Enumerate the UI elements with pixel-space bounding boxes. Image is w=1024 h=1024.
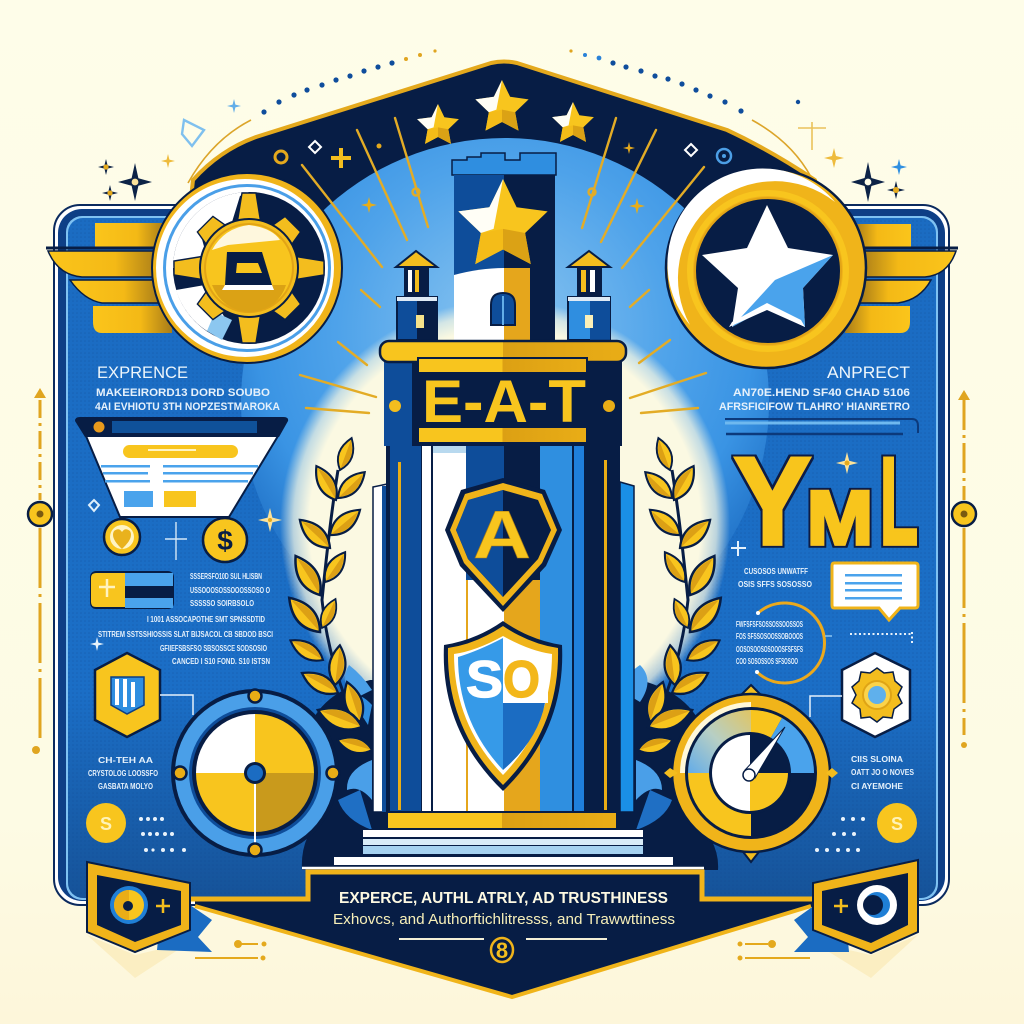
wings: left: [46, 223, 172, 333]
dotted tick row: [850, 632, 912, 643]
dots: right: [815, 817, 865, 852]
S coin: left: [86, 803, 126, 843]
small copy: right lower: CIIS SLOINA: [851, 755, 903, 764]
dots: left: [139, 817, 186, 852]
sparkles: top right: [752, 120, 907, 202]
ribbon badge: right: [794, 860, 918, 953]
gold rays: [300, 118, 706, 413]
circular arc callout: FOS SFSSOSOOSSOBOOOS: [736, 632, 803, 641]
column base and steps: [330, 812, 676, 869]
dome ornaments: [275, 141, 731, 214]
anprect copy: AFRSFICIFOW TLAHRO' HIANRETRO: [719, 401, 910, 413]
dome: navy crown: [180, 62, 830, 300]
small copy: right lower: [851, 755, 915, 791]
browser funnel: [75, 417, 288, 517]
anprect rule lines: [725, 419, 918, 434]
experience copy: 4AI EVHIOTU 3TH NOPZESTMAROKA: [95, 401, 280, 413]
small copy: right upper: CUSOSOS UNWATFF: [744, 567, 808, 576]
shield A: A: [473, 497, 531, 573]
experience copy: [95, 387, 280, 413]
pie gauge: left: [171, 689, 340, 857]
small copy: right lower: CI AYEMOHE: [851, 782, 904, 791]
small copy: left middle: [98, 572, 273, 666]
dial gauge: right: [664, 685, 838, 862]
light-blue arch: [241, 138, 769, 666]
experience copy: MAKEEIRORD13 DORD SOUBO: [96, 387, 270, 399]
cream halo: [280, 300, 730, 750]
laurel branch: left: [282, 436, 374, 757]
medallion: gear: [152, 173, 342, 363]
central column: [373, 445, 634, 812]
small copy: left middle: SSSSSO SOIRBSOLO: [190, 599, 254, 608]
navy foliage base: [302, 665, 718, 870]
experience heading: EXPRENCE: [97, 363, 188, 382]
bottom banner: [190, 868, 815, 997]
anprect copy: [719, 387, 910, 413]
YML title: Y: [734, 433, 811, 571]
tower with star: [452, 153, 556, 340]
column capital: [380, 341, 626, 446]
small copy: left middle: SSSERSFO10D SUL HLISBN: [190, 572, 262, 581]
pale shadows under badges: [87, 935, 918, 978]
banner headline: EXPERCE, AUTHL ATRLY, AD TRUSTHINESS: [339, 890, 668, 907]
banner subline: Exhovcs, and Authorftichlitresss, and Trawwttiness: [333, 911, 675, 928]
dollar coin: [203, 518, 247, 562]
YML title: L: [880, 433, 918, 571]
ornament lines: left: [195, 941, 266, 960]
E-A-T label: E-A-T: [422, 368, 586, 435]
sparkle near copy: [90, 637, 104, 651]
circular arc callout: OOSOSOOSOSOOOSFSFSFS: [736, 645, 803, 654]
turret: left: [396, 251, 437, 340]
small copy: right lower: OATT JO O NOVES: [851, 768, 915, 777]
speech bubble: [832, 563, 918, 620]
anprect copy: AN70E.HEND SF40 CHAD 5106: [733, 387, 910, 399]
medallion: star: [666, 168, 866, 368]
small copy: left lower: CRYSTOLOG LOOSSFO: [88, 769, 158, 778]
ribbon badge: left: [87, 862, 212, 952]
small copy: left lower: [88, 756, 158, 791]
S coin: left: S: [100, 814, 112, 834]
circular arc callout: [736, 603, 832, 683]
S coin: right: [877, 803, 917, 843]
YML title: [734, 433, 918, 571]
circular arc callout: COO SOSOSSOS SFSOSOO: [736, 657, 798, 666]
shield SO: S: [466, 651, 503, 709]
blue main panel: [54, 205, 949, 905]
small copy: left middle: USSOOOSOSSOOOSSOSO O: [190, 586, 270, 595]
shield A: [445, 478, 562, 612]
laurel branch: right: [636, 436, 728, 757]
small copy: left middle: STITREM SSTSSHIOSSIS SLAT BIJSACOL CB SBDOD BSCI: [98, 630, 273, 639]
small copy: left middle: GFIIEFSBSFSO SBSOSSCE SODSOSIO: [160, 644, 267, 653]
side rail: right: [952, 390, 976, 748]
hex icon: gear: [810, 653, 910, 737]
shield SO: [444, 621, 562, 791]
small copy: right upper: [738, 567, 812, 589]
small copy: left middle: I 1001 ASSOCAPOTHE SMT SPNSSDTID: [147, 615, 265, 624]
anprect heading: ANPRECT: [827, 363, 910, 382]
hex icon: books: [95, 653, 193, 737]
sparkles near YML: [731, 452, 858, 556]
three top stars: [417, 80, 594, 144]
sparkles: top left: [98, 99, 251, 201]
YML title: M: [807, 476, 873, 561]
funnel sparkles: [89, 500, 282, 560]
circular arc callout: FWFSFSFSOSSOSSOOSSOS: [736, 620, 803, 629]
ornament lines: right: [738, 941, 810, 960]
small copy: right upper: OSIS SFFS SOSOSSO: [738, 580, 812, 589]
small copy: left lower: CH-TEH AA: [98, 756, 153, 765]
heart coin: [104, 519, 140, 555]
small copy: left middle: CANCED I S10 FOND. S10 ISTSN: [172, 657, 270, 666]
wings: right: [845, 224, 958, 333]
dotted arc above dome: [261, 49, 800, 115]
turret: right: [568, 251, 610, 340]
small copy: left lower: GASBATA MOLYO: [98, 782, 153, 791]
shield SO: O: [503, 651, 540, 709]
S coin: right: S: [891, 814, 903, 834]
dollar coin: $: [217, 525, 233, 556]
side rail: left: [28, 388, 52, 754]
banner divider and number: 8: [496, 938, 508, 963]
card icon: [90, 571, 174, 609]
banner divider and number: [399, 938, 607, 963]
